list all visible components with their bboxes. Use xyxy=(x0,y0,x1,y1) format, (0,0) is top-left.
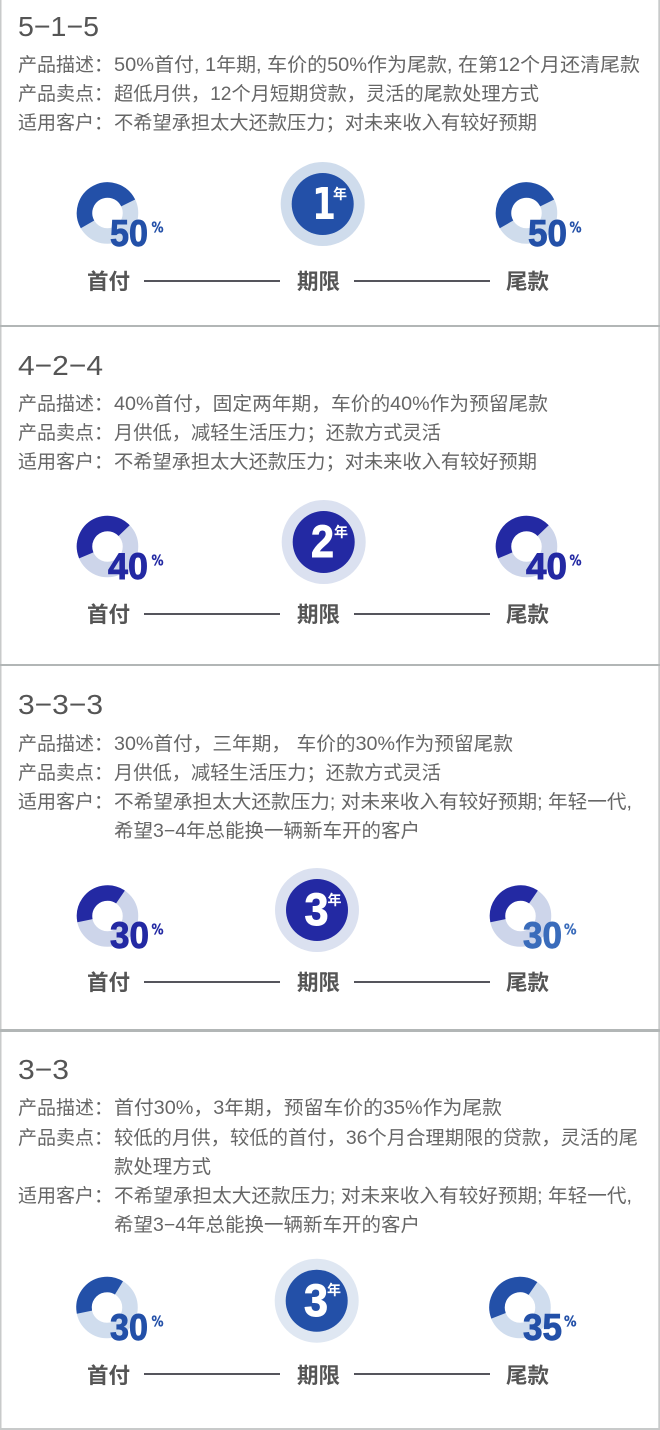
donut: down payment 30% xyxy=(80,1281,164,1348)
labels and connectors xyxy=(87,1364,550,1388)
text block: description: 不希望承担太大还款压力; 对未来收入有较好预期; 年轻一代, xyxy=(114,1185,632,1207)
badge: term 2 years: 2 xyxy=(311,516,334,567)
donut: down payment 40%: 40 xyxy=(108,546,148,587)
donut: down payment 50%: 50 xyxy=(110,213,148,254)
heading: 3-3-3: 3−3−3 xyxy=(18,689,103,720)
text block: description: 产品描述： xyxy=(18,1097,113,1119)
donut: down payment 30%: % xyxy=(152,920,164,938)
text block: description: 适用客户： xyxy=(18,451,113,473)
text block: description: 适用客户： xyxy=(18,112,113,134)
badge: term 1 year: 年 xyxy=(333,184,347,204)
panel: 5-1-5 xyxy=(18,11,640,294)
labels and connectors: 首付 xyxy=(87,971,130,995)
text block: description: 不希望承担太大还款压力; 对未来收入有较好预期; 年轻一代, xyxy=(114,791,632,813)
donut: balloon 50%: 50 xyxy=(528,213,567,254)
text block: description: 适用客户： xyxy=(18,791,113,813)
text block: description: 适用客户： xyxy=(18,1185,113,1207)
donut: balloon 30%: % xyxy=(564,920,576,938)
donut: down payment 30% xyxy=(81,889,164,956)
donut: balloon 30% xyxy=(494,889,576,956)
text block: description: 月供低，减轻生活压力；还款方式灵活 xyxy=(114,762,441,784)
labels and connectors: 期限 xyxy=(297,603,340,627)
donut: down payment 30%: % xyxy=(152,1312,164,1330)
labels and connectors xyxy=(87,603,550,627)
donut: balloon 40%: % xyxy=(570,552,582,570)
text block: description: 超低月供，12个月短期贷款，灵活的尾款处理方式 xyxy=(114,83,539,105)
labels and connectors: 期限 xyxy=(297,270,340,294)
labels and connectors: 尾款 xyxy=(506,971,550,995)
donut: down payment 40%: % xyxy=(152,552,164,570)
badge: term 2 years xyxy=(282,500,366,584)
panel: 4-2-4 xyxy=(18,350,582,627)
labels and connectors: 尾款 xyxy=(506,603,550,627)
donut: down payment 30%: 30 xyxy=(110,1307,148,1348)
text block: description: 产品卖点： xyxy=(18,422,113,444)
panel: 3-3-3 xyxy=(18,689,632,995)
text block: description: 产品卖点： xyxy=(18,762,113,784)
donut: balloon 30%: 30 xyxy=(523,915,562,956)
donut: down payment 30%: 30 xyxy=(110,915,149,956)
text block: description: 不希望承担太大还款压力；对未来收入有较好预期 xyxy=(114,451,537,473)
text block: description: 希望3−4年总能换一辆新车开的客户 xyxy=(114,1214,420,1236)
donut: balloon 50% xyxy=(495,182,582,254)
text block: description xyxy=(18,733,632,842)
donut: balloon 35% xyxy=(491,1278,576,1348)
text block: description: 产品描述： xyxy=(18,54,113,76)
badge: term 3 years xyxy=(275,1259,359,1343)
labels and connectors: 期限 xyxy=(297,1364,340,1388)
badge: term 3 years xyxy=(275,868,359,952)
donut: balloon 35%: % xyxy=(564,1312,576,1330)
text block: description xyxy=(18,54,640,134)
heading: 3-3: 3−3 xyxy=(18,1054,69,1085)
donut: balloon 50%: % xyxy=(570,218,582,236)
panel: 3-3 xyxy=(18,1054,638,1388)
donut: balloon 40% xyxy=(497,517,582,587)
donut: down payment 50%: % xyxy=(152,218,164,236)
labels and connectors: 首付 xyxy=(87,1364,130,1388)
text block: description: 30%首付，三年期， 车价的30%作为预留尾款 xyxy=(114,733,513,755)
badge: term 1 year xyxy=(281,162,365,246)
badge: term 3 years: 年 xyxy=(327,1280,341,1300)
text block: description xyxy=(18,393,548,473)
badge: term 3 years: 年 xyxy=(328,890,342,910)
badge: term 2 years: 年 xyxy=(334,522,348,542)
badge: term 3 years: 3 xyxy=(304,1275,328,1326)
text block: description: 希望3−4年总能换一辆新车开的客户 xyxy=(114,820,420,842)
donut: balloon 40%: 40 xyxy=(526,546,567,587)
text block: description: 产品卖点： xyxy=(18,83,113,105)
heading: 4-2-4: 4−2−4 xyxy=(18,350,103,381)
labels and connectors: 尾款 xyxy=(506,270,550,294)
badge: term 3 years: 3 xyxy=(304,884,328,935)
text block: description: 产品描述： xyxy=(18,733,113,755)
text block: description: 产品卖点： xyxy=(18,1127,113,1149)
labels and connectors: 首付 xyxy=(87,603,130,627)
labels and connectors: 首付 xyxy=(87,270,130,294)
text block: description: 不希望承担太大还款压力；对未来收入有较好预期 xyxy=(114,112,537,134)
donut: balloon 35%: 35 xyxy=(523,1307,562,1348)
badge: term 1 year: 1 xyxy=(312,179,336,230)
labels and connectors: 尾款 xyxy=(506,1364,550,1388)
text block: description xyxy=(18,1097,638,1236)
labels and connectors: 期限 xyxy=(297,971,340,995)
donut: down payment 50% xyxy=(76,182,164,254)
text block: description: 40%首付，固定两年期，车价的40%作为预留尾款 xyxy=(114,393,548,415)
heading: 5-1-5: 5−1−5 xyxy=(18,11,99,42)
text block: description: 较低的月供，较低的首付，36个月合理期限的贷款，灵活的尾 xyxy=(114,1127,638,1149)
labels and connectors xyxy=(87,971,550,995)
text block: description: 产品描述： xyxy=(18,393,113,415)
text block: description: 款处理方式 xyxy=(114,1156,211,1178)
text block: description: 50%首付, 1年期, 车价的50%作为尾款, 在第12个月还清尾款 xyxy=(114,54,640,76)
labels and connectors xyxy=(87,270,550,294)
text block: description: 月供低，减轻生活压力；还款方式灵活 xyxy=(114,422,441,444)
text block: description: 首付30%，3年期，预留车价的35%作为尾款 xyxy=(114,1097,502,1119)
donut: down payment 40% xyxy=(78,517,164,587)
